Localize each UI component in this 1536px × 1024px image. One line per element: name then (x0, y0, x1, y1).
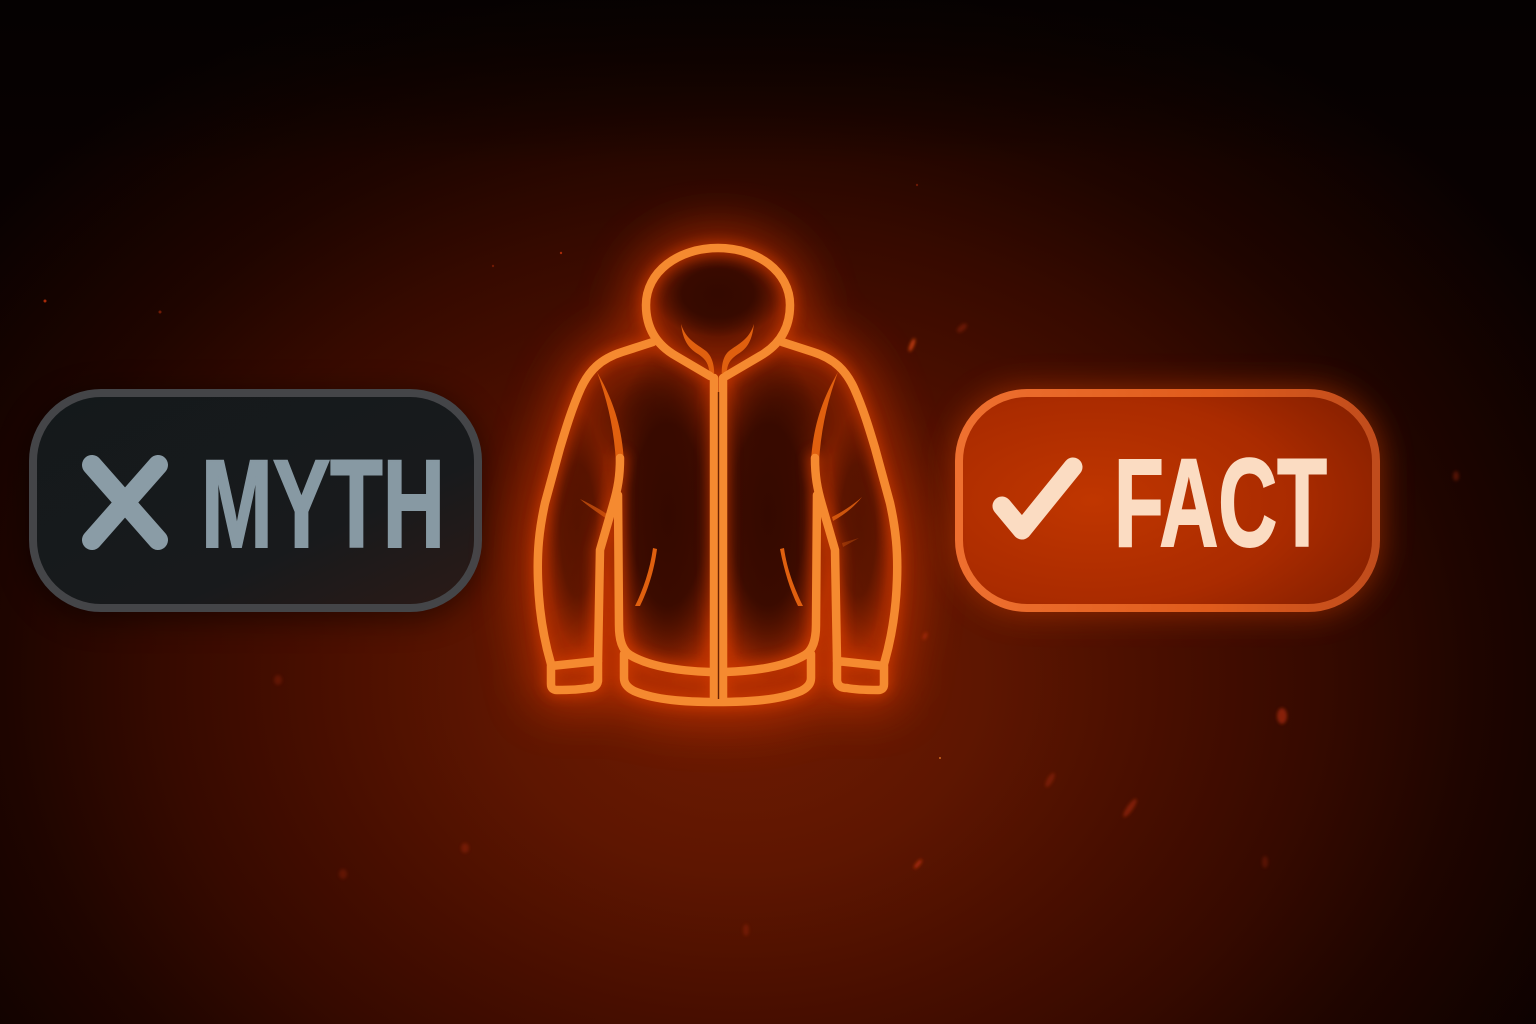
fact badge body (959, 393, 1376, 608)
myth badge body (33, 393, 478, 608)
icon: myth cross (92, 465, 158, 540)
icon: neon hooded jacket (538, 248, 897, 702)
jacket neon outline (538, 248, 897, 702)
myth label: MYTH (201, 435, 445, 574)
fact badge glow (955, 389, 1380, 612)
jacket inner dark shading (546, 249, 890, 680)
jacket near glow (538, 248, 897, 702)
panel: myth badge (29, 393, 482, 618)
jacket zipper gap (718, 392, 720, 699)
badge shadow (29, 395, 482, 618)
jacket thin seams (580, 324, 862, 606)
jacket outer halo (538, 248, 897, 702)
fact label: FACT (1114, 434, 1327, 573)
panel: fact badge (955, 389, 1380, 612)
floating ember specks (44, 184, 1459, 936)
icon: fact check mark (1002, 467, 1073, 530)
